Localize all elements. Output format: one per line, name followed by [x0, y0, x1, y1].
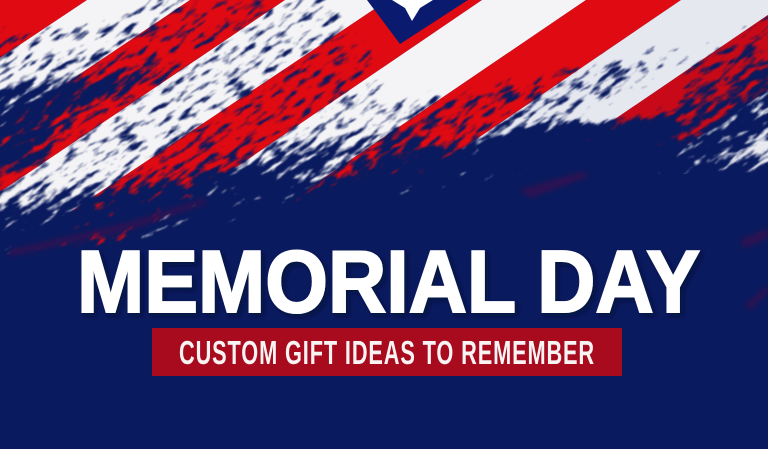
- brush texture overlay: [0, 0, 768, 262]
- banner bar: [152, 328, 622, 376]
- banner text: CUSTOM GIFT IDEAS TO REMEMBER: [179, 334, 594, 371]
- faint red brush streaks: [10, 172, 768, 310]
- flag canton with star: [367, 0, 468, 44]
- title: MEMORIAL DAY: [77, 232, 700, 331]
- icon: star: [392, 0, 433, 21]
- solid navy lower field: [0, 172, 768, 449]
- subtitle banner: [152, 328, 622, 376]
